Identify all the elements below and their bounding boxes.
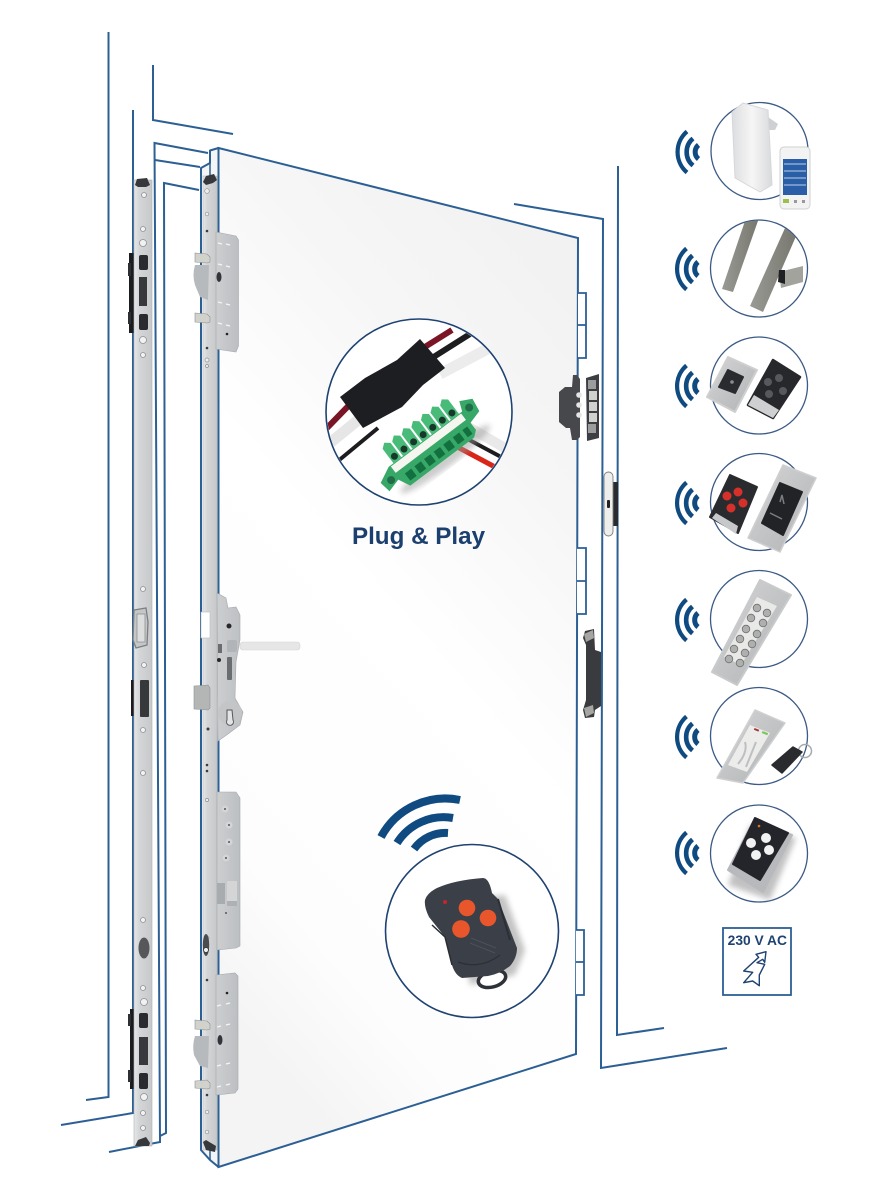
icon: wireless signal 7 xyxy=(677,832,698,874)
icon: wireless signal 1 xyxy=(678,132,698,172)
panel: fingerprint scanner and key fob xyxy=(710,688,812,784)
panel: fingerprint reader and red remote xyxy=(710,454,816,552)
room outline: right wall lines xyxy=(514,166,727,1068)
door locking bar with top hook lock xyxy=(203,174,217,1152)
panel: wifi gateway and smartphone app xyxy=(711,102,810,209)
lower gear plate xyxy=(203,792,240,956)
panel: plug & play connectors xyxy=(323,319,512,505)
connector photo xyxy=(323,330,505,505)
icon: wireless signal 3 xyxy=(677,366,698,406)
remote key fob xyxy=(425,878,517,990)
electronic contact on frame xyxy=(604,472,618,536)
panel: transponder reader and black remote xyxy=(707,337,808,434)
upper lock plate xyxy=(194,232,238,352)
door handle xyxy=(240,642,300,650)
remote shadow xyxy=(455,895,525,985)
heading: Plug & Play: Plug & Play xyxy=(352,523,486,550)
panel: keypad xyxy=(710,570,808,685)
strike plates on right frame xyxy=(559,374,599,441)
panel: concealed reader in door profile xyxy=(710,215,808,317)
callout: 230 V AC power xyxy=(723,928,791,995)
left locking bar (frame keeper strip) xyxy=(128,178,152,1146)
icon: wireless signal 5 xyxy=(677,600,698,640)
icon: large wireless signal xyxy=(381,799,460,849)
label: 230 V AC xyxy=(728,933,787,948)
hinges on door edge xyxy=(576,293,586,995)
icon: wireless signal 2 xyxy=(677,248,698,290)
icon: wireless signal 4 xyxy=(677,482,698,524)
lower lock plate (bottom hook lock) xyxy=(193,973,238,1095)
icon: wireless signal 6 xyxy=(677,716,698,758)
panel: wireless remote xyxy=(386,844,558,1018)
icon: lightning bolt xyxy=(744,952,766,986)
main mortise lock xyxy=(194,593,243,741)
magnetic sensor on frame xyxy=(583,629,601,718)
door leaf xyxy=(201,148,578,1167)
panel: four-button handheld remote xyxy=(710,805,808,902)
room outline: left wall lines xyxy=(61,32,233,1125)
door frame: left jamb lines xyxy=(109,143,208,1152)
green terminal block xyxy=(380,398,492,496)
